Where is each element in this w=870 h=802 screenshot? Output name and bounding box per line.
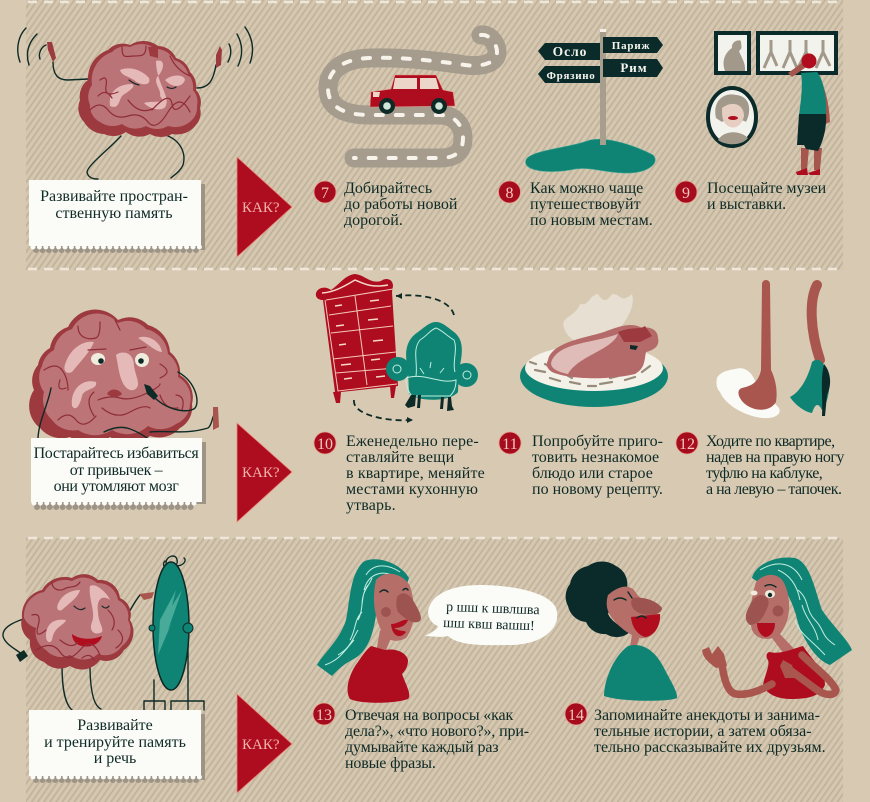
text 13: Отвечая на вопросы «как (345, 707, 513, 724)
white card: habits: от привычек – (70, 462, 164, 479)
illustration: man with afro and woman laughing (566, 557, 852, 701)
text 8: путешествовуйт (530, 196, 641, 213)
text 8: Как можно чаще (530, 180, 643, 197)
white card: habits: они утомляют мозг (54, 478, 179, 495)
text 7: Добирайтесь (344, 180, 432, 197)
illustration: signpost: Париж (612, 40, 650, 52)
number 13 (313, 703, 335, 725)
white card: memory and speech: и тренируйте память (44, 734, 186, 751)
text 8: по новым местам. (530, 212, 653, 229)
text 11: Попробуйте приго- (532, 433, 663, 450)
panel: bottom hatched background (26, 538, 843, 802)
white card: habits: Постарайтесь избавиться (34, 445, 199, 462)
number 10: 10 (317, 436, 333, 453)
illustration: signpost (526, 29, 663, 173)
text 10: утварь. (346, 497, 396, 514)
text 7: до работы новой (344, 196, 458, 213)
white card: memory and speech (29, 710, 205, 780)
text 11: блюдо или старое (532, 465, 653, 482)
white card: memory and speech: Развивайте (77, 717, 153, 734)
text 12: туфлю на каблуке, (706, 465, 822, 482)
text 14: тельно рассказывайте их друзьям. (594, 739, 826, 756)
text 10: ставляйте вещи (346, 449, 455, 466)
number 13: 13 (316, 707, 332, 724)
illustration: woman speaking with bubble (317, 559, 557, 703)
number 11 (499, 432, 521, 454)
text 13: дела?», «что нового?», при- (345, 723, 529, 740)
white card: memory and speech: и речь (94, 750, 136, 767)
number 14: 14 (568, 707, 584, 724)
text 12: Ходите по квартире, (706, 433, 835, 450)
white card: habits (31, 438, 206, 507)
number 11: 11 (502, 436, 518, 453)
number 9: 9 (682, 185, 690, 202)
text 12: надев на правую ногу (706, 449, 844, 466)
text 9: и выставки. (707, 196, 786, 213)
text 10: в квартире, меняйте (346, 465, 485, 482)
number 12 (676, 432, 698, 454)
text 10: местами кухонную (346, 481, 478, 498)
illustration: woman speaking with bubble: шш квш вашш! (443, 616, 535, 634)
illustration: winding road with car (328, 35, 497, 158)
text 7: дорогой. (344, 212, 403, 229)
arrow: how 2: КАК? (242, 465, 280, 481)
arrow: how 1: КАК? (242, 200, 280, 216)
illustration: worried brain (29, 310, 219, 444)
illustration: chest of drawers and armchair (316, 274, 478, 423)
number 8: 8 (506, 185, 514, 202)
arrow: how 2 (237, 423, 292, 522)
number 12: 12 (679, 436, 695, 453)
illustration: brain looking in mirror (3, 556, 204, 710)
text 14: Запоминайте анекдоты и занима- (594, 707, 820, 724)
text 12: а на левую – тапочек. (706, 481, 841, 498)
text 13: думывайте каждый раз (345, 739, 498, 756)
number 9 (675, 181, 697, 203)
number 14 (565, 703, 587, 725)
text 11: товить незнакомое (532, 449, 659, 466)
text 13: новые фразы. (345, 755, 436, 772)
text 11: по новому рецепту. (532, 481, 663, 498)
illustration: slipper and high heel feet (716, 280, 830, 418)
text 10: Еженедельно пере- (346, 433, 479, 450)
text 14: тельные истории, а затем обяза- (594, 723, 812, 740)
white card: spatial memory (29, 180, 205, 250)
illustration: signpost: Осло (553, 44, 587, 59)
arrow: how 3 (237, 694, 292, 793)
text 9: Посещайте музеи (707, 180, 827, 197)
illustration: museum visitor (708, 33, 836, 175)
white card: spatial memory: ственную память (55, 205, 173, 222)
arrow: how 1 (237, 157, 292, 257)
illustration: roast chicken on plate (520, 294, 668, 407)
arrow: how 3: КАК? (242, 737, 280, 753)
illustration: signpost: Рим (620, 60, 648, 75)
number 8 (498, 181, 520, 203)
number 10 (314, 432, 336, 454)
number 7: 7 (321, 185, 329, 202)
illustration: dancing brain with headphones (18, 27, 253, 179)
number 7 (314, 181, 336, 203)
white card: spatial memory: Развивайте простран- (40, 188, 188, 205)
panel: top hatched background (26, 0, 843, 270)
illustration: woman speaking with bubble: р шш к швлшва (446, 600, 541, 618)
illustration: signpost: Фрязино (546, 70, 596, 82)
